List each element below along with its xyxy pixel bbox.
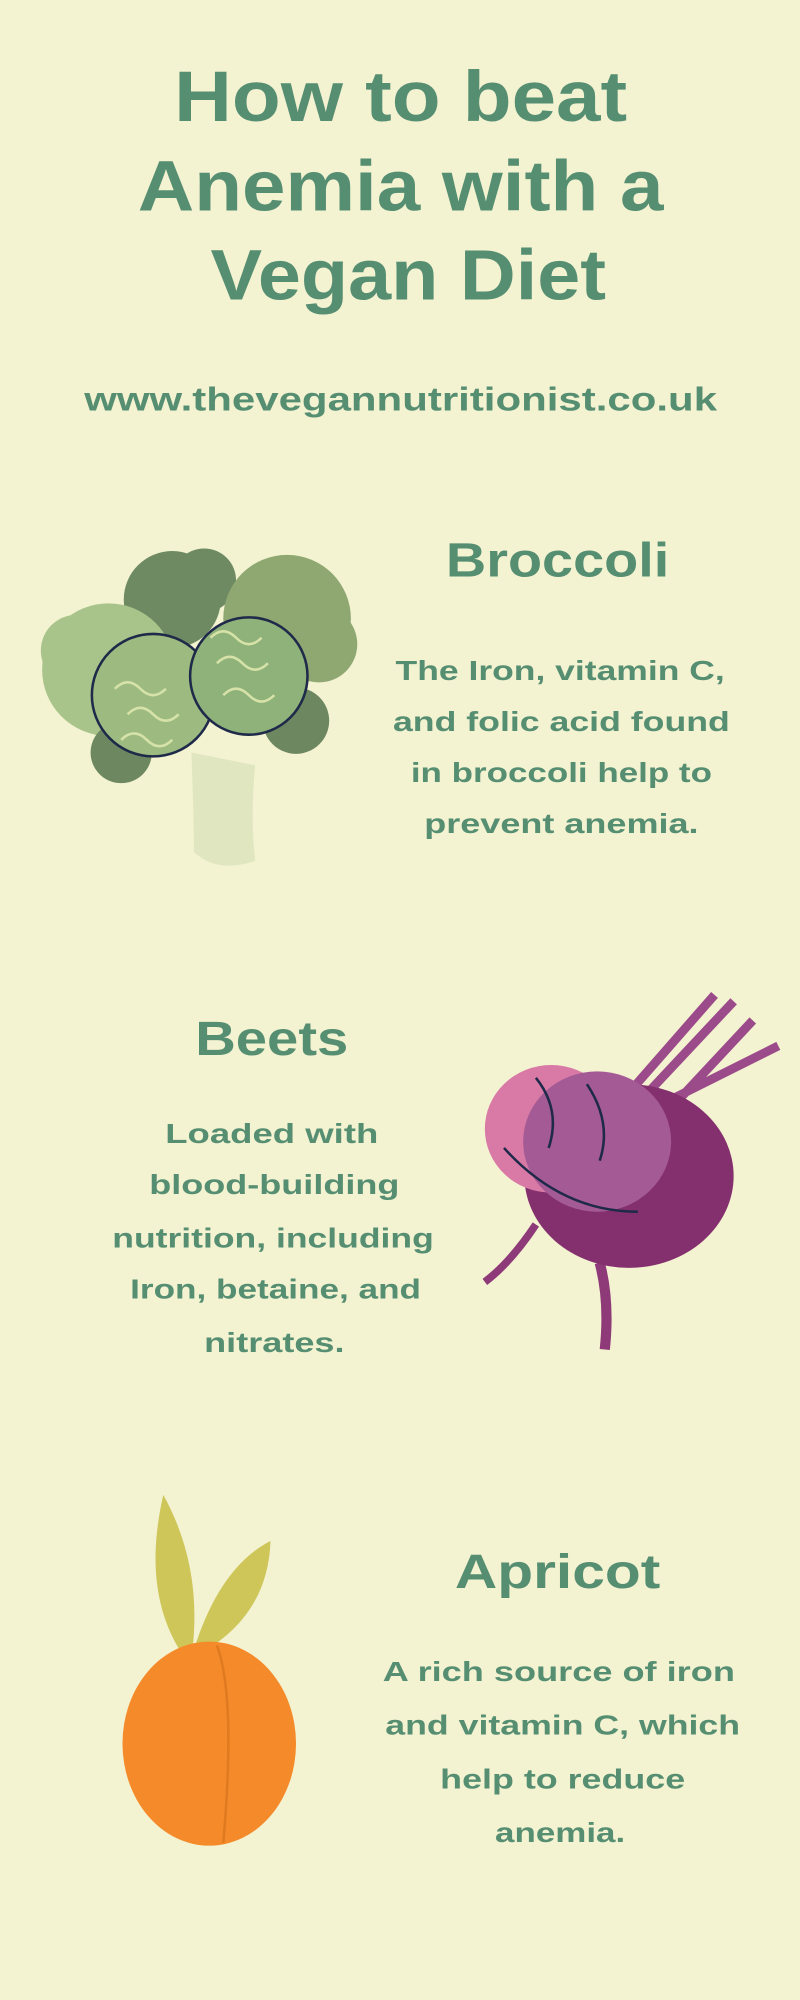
text: beets: nitrates. (204, 1327, 344, 1358)
heading: beets: Beets (195, 1012, 348, 1066)
icon: apricot (122, 1495, 296, 1846)
text: beets: Loaded with (165, 1118, 378, 1149)
text: apricot: and vitamin C, which (385, 1710, 740, 1741)
icon: broccoli (41, 548, 357, 866)
title: Anemia with a (138, 146, 665, 226)
text: apricot: A rich source of iron (383, 1656, 735, 1687)
title: How to beat (174, 57, 627, 137)
url: www.thevegannutritionist.co.uk (83, 382, 718, 419)
text: beets: nutrition, including (112, 1222, 434, 1253)
text: broccoli: prevent anemia. (424, 808, 699, 839)
text: apricot: help to reduce (440, 1763, 685, 1794)
text: apricot (383, 1656, 740, 1848)
text: broccoli: The Iron, vitamin C, (396, 655, 725, 686)
icon: beet (485, 995, 778, 1349)
text: beets: Iron, betaine, and (130, 1273, 421, 1304)
text: beets: blood-building (149, 1169, 399, 1200)
title (138, 57, 665, 316)
heading: broccoli: Broccoli (446, 534, 669, 588)
text: broccoli (393, 655, 730, 839)
heading: apricot: Apricot (455, 1545, 660, 1599)
text: broccoli: in broccoli help to (411, 757, 712, 788)
title: Vegan Diet (211, 236, 606, 316)
text: broccoli: and folic acid found (393, 706, 730, 737)
text: apricot: anemia. (495, 1817, 625, 1848)
text: beets (112, 1118, 434, 1358)
